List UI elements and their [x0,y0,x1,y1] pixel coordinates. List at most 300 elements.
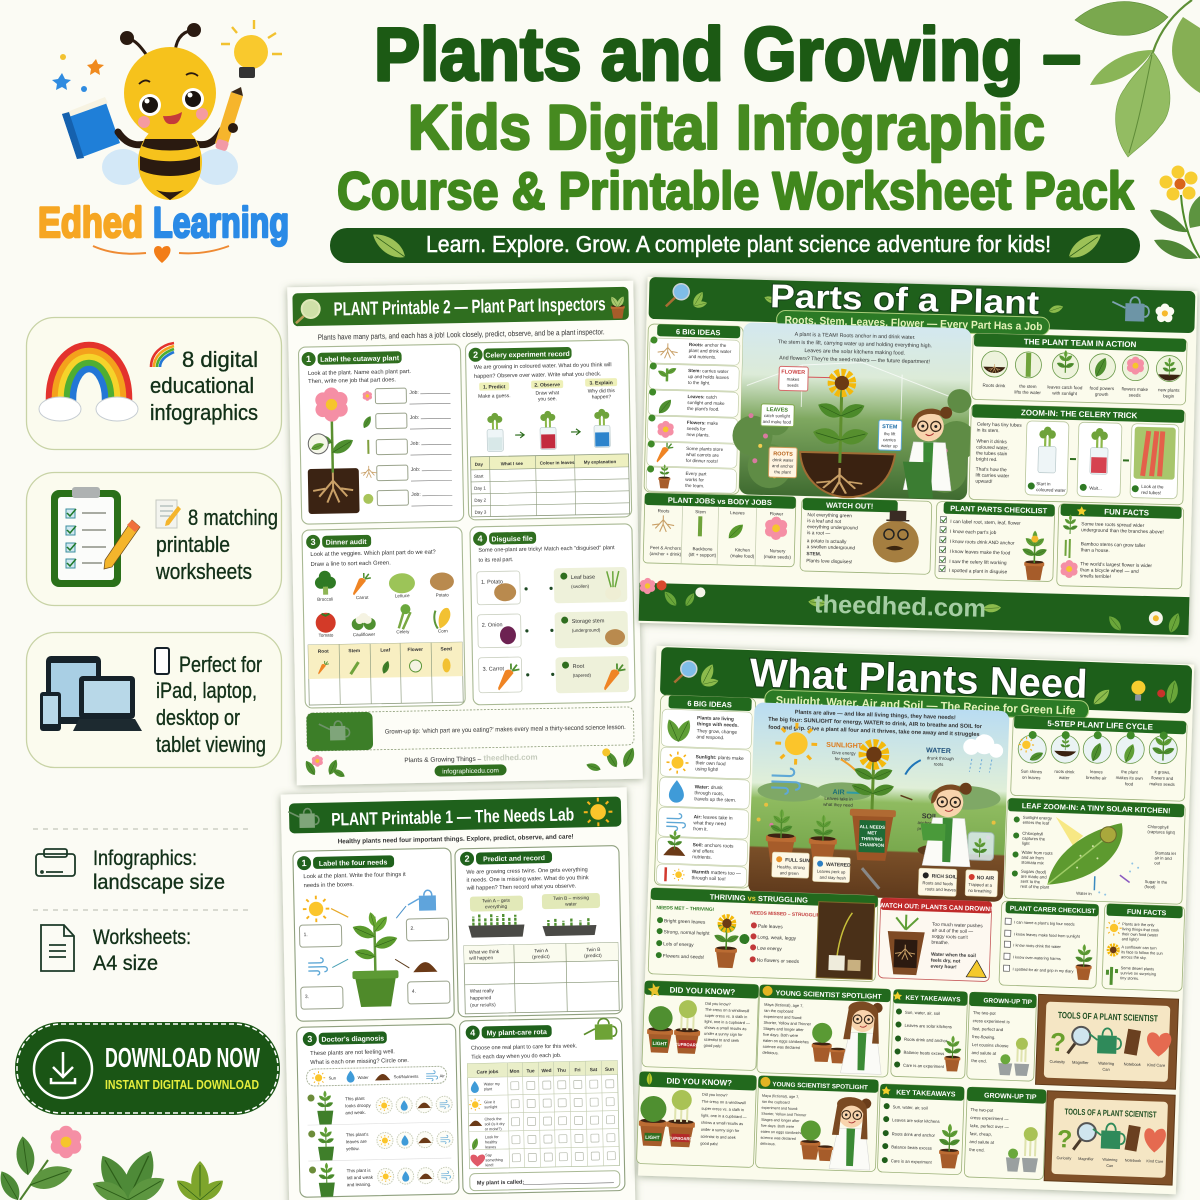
panel: zoom-in celery trick: coloured water, [976,445,1009,451]
panel 3: doctor's diagnosis: Doctor's diagnosis [321,1035,384,1044]
panel: 6 big ideas: nutrients. [692,854,712,861]
panel: thriving vs struggling: THRIVING vs STRUGGLING [710,892,808,905]
needs key: Soil/Nutrients [394,1074,419,1079]
need icons and labels: AIR [832,789,845,796]
icon: stars [52,54,104,92]
rota table: leaves [485,1145,496,1149]
row 2: tools of a plant scientist: Kind Care [1146,1159,1163,1164]
condition labels: NO AIR [977,875,994,882]
panel 4: my plant-care rota [459,1018,625,1194]
panel: fun facts: FUN FACTS [1127,909,1167,917]
row 1: young scientist spotlight [757,985,891,1077]
needs drawing: 3. [305,994,309,1000]
panel: watch out: is a root — [807,530,830,537]
button text: INSTANT DIGITAL DOWNLOAD [105,1077,259,1092]
panel 2: celery experiment record: Celery experiment record [485,351,570,360]
panel: plant jobs vs body jobs: (make seeds) [764,554,792,560]
card text: infographics [150,400,258,425]
row 2: did you know: Did you know? [702,1092,728,1098]
twin labels and trays [468,893,601,938]
panel: 6 big ideas: through roots, [694,790,724,797]
match rows: (underground) [572,627,601,633]
panel 2: predict and record: will happen? Then record what you observe. [466,883,577,892]
panel: 6 big ideas: Leaves: catch [687,394,717,400]
logo: Edhed Learning bee [38,20,289,263]
rota table: or moist?) [485,1127,502,1131]
panel: plant carer checklist: PLANT CARER CHECKLIST [1010,905,1096,915]
potted plants: THRIVING [861,836,883,842]
panel 1: label the cutaway plant: Then, write one job that part does. [308,377,396,385]
row 2: key takeaways: Roots drink and anchor [892,1131,936,1138]
panel: 6 big ideas: and offers [692,848,714,855]
panel: 5-step plant life cycle: makes its own [1116,775,1144,781]
leaf notes: Stomata let [1155,850,1177,856]
panel: device viewing [26,632,282,768]
diagnosis rows: This plant is [347,1168,371,1173]
panel: zoom-in celery trick [969,404,1185,505]
predict table: (predict) [532,954,550,960]
scene intro text: The stem is the lift, carrying water up and holding everything high. [778,339,932,349]
panel: plant parts checklist: I can label root, stem, leaf, flower [950,519,1021,527]
icon: green watering can [584,1018,617,1040]
panel: plant jobs vs body jobs: Flower [770,511,784,517]
row 2: did you know: shows a small results as [701,1120,743,1126]
row 1: grown-up tip: the end. [971,1058,987,1064]
panel: 5-step plant life cycle: on leaves [1022,775,1041,780]
row 1: grown-up tip: fast, perfect and [972,1026,1004,1032]
panel: thriving vs struggling: Lots of energy [663,941,694,948]
match rows: Root [573,664,585,670]
panel: 6 big ideas: sunlight and make [687,400,725,406]
panel: 6 big ideas: Roots: anchor the [689,342,727,348]
scene labels: FLOWER [781,369,805,376]
panel: zoom-in celery trick: Wait... [1089,485,1102,491]
rota table: soil (is it dry [485,1122,505,1126]
plant name line: My plant is called: [477,1180,524,1187]
vegetable labels: Potato [436,592,449,598]
row 2: did you know: LIGHT [645,1135,660,1141]
panel: plant jobs vs body jobs: Nursery [770,548,786,554]
row 2: tools of a plant scientist: Notebook [1125,1158,1141,1163]
size details [33,829,250,975]
scene labels: the lift [884,431,896,436]
vegetable labels: Tomato [319,633,334,638]
panel: 6 big ideas: 6 BIG IDEAS [676,327,721,337]
row 1: tools of a plant scientist: Watering [1098,1060,1114,1066]
icon: phone [155,648,169,674]
icon: wings [102,149,238,185]
twin labels and trays: Twin B – missing [553,895,589,902]
rota table: sunlight [484,1105,498,1109]
panel: plant carer checklist: I can name a plant's big four needs [1014,919,1075,927]
worksheet: PLANT Printable 1 [281,787,636,1200]
leaf notes: rest of the plant [1020,884,1050,890]
row 2: young scientist spotlight: Shorter, Yellow and Thinner [761,1112,807,1117]
row 2: young scientist spotlight: ran the cupboard [762,1100,790,1105]
vegetable labels: Lettuce [395,593,410,598]
cycle steps [1018,731,1178,768]
decoration: top right leaves [1075,0,1200,157]
decoration: worksheet plants [303,746,638,780]
condition labels: RICH SOIL [932,874,957,880]
row 2: did you know: DID YOU KNOW? [666,1076,732,1088]
panel 2: celery experiment record: We are growing in coloured water. What do you think will [474,362,612,371]
experiment steps: Make a guess. [478,393,511,400]
panel 2: celery experiment record: 2 [473,350,478,360]
text: infographics size: landscape size [93,871,225,894]
vegetable labels: Cauliflower [353,632,376,637]
idea rows [646,338,740,493]
panel: 6 big ideas: their own food [695,760,726,767]
needs drawing: 1. [304,932,308,938]
scene intro text: A plant is a TEAM! Roots anchor in and drink water. [795,332,916,341]
record table: Day 2 [474,498,487,503]
worksheet: PLANT Printable 2 [287,281,643,785]
panel: fun facts: survive on surprising [1120,970,1156,976]
panel 4: disguise file: 4 [478,534,483,544]
panel: plant jobs vs body jobs: Kitchen [735,547,751,553]
row 2: young scientist spotlight: eaten on eggs sandwiches [761,1130,805,1135]
leaf notes: (food) [1144,884,1156,889]
panel: 5-step plant life cycle: it grows, [1154,769,1171,775]
twin labels and trays: Twin A – gets [482,898,511,904]
panel: 6 big ideas: travels up the stem. [694,796,736,804]
panel: watch out: STEM. [806,551,821,557]
rota table: Look for [485,1135,499,1139]
icon: light bulb [221,20,282,78]
row 2: young scientist spotlight: Stages and longer after [761,1118,800,1123]
button text: DOWNLOAD NOW [105,1042,260,1073]
leaf notes: Water from roots [1022,850,1053,856]
experiment steps: 3. Explain [589,380,613,387]
panel: watch out plants can drown: feels dry, not [931,958,961,965]
need icons and labels: Leaves take in [824,796,853,802]
job lines [409,390,421,498]
panel: watch out [800,498,932,574]
row 2: did you know: scientist to and seek [700,1134,736,1140]
panel: fun facts: Some tree roots spread wider [1081,521,1145,529]
decoration: yellow flower and leaves [1150,166,1200,259]
panel: fun facts: underground than the branches above! [1081,527,1164,535]
panel: 6 big ideas: and nutrients. [688,354,716,360]
panel: plant team in action: lifts the water [1014,390,1042,395]
row 1: young scientist spotlight: Maya (fictional), age 7, [764,1002,804,1008]
panel: fun facts: A sunflower can turn [1121,944,1157,950]
leaf drawing [1047,817,1141,897]
scene intro text: Leaves are the solar kitchens making food. [804,348,905,357]
panel 3: dinner audit: 3 [311,537,316,547]
panel: zoom-in celery trick: upward! [975,479,993,485]
panel: watch out plants can drown: Water when the soil [931,952,976,959]
card text: worksheets [155,559,252,584]
logo wordmark: Edhed [38,199,143,247]
panel: zoom-in celery trick: Look at the [1141,484,1164,489]
need icons and labels: Give energy [832,750,857,756]
vegetables [315,568,455,633]
row 2: did you know: under a sunny sign for [701,1127,740,1133]
panel: plant carer checklist: I know leaves make food from sunlight [1014,931,1081,939]
icon: rainbow [39,345,138,421]
panel: fun facts: The world's largest flower is wider [1080,561,1153,569]
job lines: Job: [411,492,421,498]
panel 3: dinner audit: Dinner audit [326,539,367,547]
row 1: young scientist spotlight: experiment and found: [764,1014,803,1020]
scene labels: drink water [772,457,794,463]
row 1: key takeaways: Sun, water, air, soil [905,1010,940,1016]
row 2: young scientist spotlight: YOUNG SCIENTIST SPOTLIGHT [772,1081,868,1091]
panel: plant parts checklist: I know each part's job [950,529,997,536]
panel: plant carer checklist: I spotted for air and grip in my diary [1012,966,1074,974]
panel: 6 big ideas: Soil: anchors roots [693,842,734,850]
row 1: young scientist spotlight: YOUNG SCIENTIST SPOTLIGHT [775,990,882,1001]
rota table: Fri [574,1067,581,1074]
panel: 6 big ideas: and respond. [696,734,725,741]
scene: garden with young scientist [748,702,1010,902]
panel: plant jobs vs body jobs [643,493,796,567]
icon: bee body [118,23,222,200]
row 1: grown-up tip: and salute at [971,1050,997,1056]
panel: watch out plants can drown: breathe. [931,940,949,946]
icon: tablet, laptop and phone [40,656,142,731]
panel: plant team in action: the stem [1019,384,1037,389]
panel: 6 big ideas: up and holds leaves [688,374,730,380]
row 1: key takeaways: KEY TAKEAWAYS [905,995,961,1004]
celery cups [487,409,610,452]
needs drawing [299,890,450,1009]
panel: plant team in action: growth [1095,392,1109,397]
match rows: Leaf base [571,575,595,581]
logo wordmark [38,199,289,247]
scene labels: and anchor [772,463,794,469]
panel: zoom-in celery trick: Celery has tiny tubes [977,422,1022,429]
panel: fun facts: FUN FACTS [1104,507,1150,518]
logo heart swoosh [93,246,229,263]
title line 2: Kids Digital Infographic [408,93,1045,163]
sorting table: Stem [348,648,360,654]
label boxes [375,388,408,506]
panel: plant parts checklist: I know roots drink AND anchor [950,539,1015,547]
grown-up tip [306,707,634,751]
decoration: bottom left plants [0,1126,227,1200]
panel: plant parts checklist: I spotted a plant in disguise [949,568,1008,575]
button text [105,1042,260,1092]
needs key: Air [440,1073,445,1078]
panel: 6 big ideas [644,324,743,494]
panel: watch out plants can drown: every hour! [930,964,957,970]
panel: 5-step plant life cycle: water [1059,775,1070,780]
panel 2: predict and record: it needs. One is missing water. What do you think [466,875,589,884]
scene labels: carries [883,437,896,442]
row 2: key takeaways: Balance beats excess [891,1144,932,1151]
celery steps [1025,421,1179,499]
panel: 6 big ideas: They grow, change [697,728,738,736]
icon: pencil [215,87,243,152]
panel: 6 big ideas: through soil too! [691,875,726,882]
panel: 6 big ideas: Flowers: make [687,420,719,426]
potted plants: ALL NEEDS [860,824,885,830]
card text [156,652,266,757]
scene labels: makes [787,377,799,382]
download button [15,1022,280,1115]
panel: thriving vs struggling: NEEDS MISSED – STRUGGLING! [750,910,826,919]
predict table: (predict) [584,953,602,959]
row 2: grown-up tip: cress experiment — [970,1115,1009,1121]
row 1: did you know: super cress vs. a stalk in [705,1013,747,1019]
panel 4: my plant-care rota: 4 [470,1028,475,1038]
panel: plant jobs vs body jobs: Stem [695,509,706,514]
leaf notes: Sunlight energy [1023,815,1053,821]
rota table: Mon [510,1069,520,1075]
panel: 6 big ideas: Sunlight: plants make [696,754,744,762]
panel: thriving vs struggling: Low energy [757,946,783,952]
panel: thriving vs struggling: Long, weak, leggy [757,935,797,942]
worksheet header [292,287,629,326]
icon: worksheet and pencil [156,500,181,528]
row 1: young scientist spotlight: science was declared [763,1044,800,1050]
row 1: did you know: light, one in a cupboard — [704,1019,750,1025]
row 1: grown-up tip: free-flowing. [972,1034,996,1040]
rota table: something [485,1158,503,1162]
row 2: young scientist spotlight [755,1076,879,1172]
row 1: did you know: The cress on a windowsill [705,1007,749,1013]
leaf notes: air in and [1154,855,1172,861]
panel 2: predict and record: 2 [464,854,470,864]
needs key: Sun [329,1075,337,1081]
experiment steps [478,378,617,404]
panel: zoom-in celery trick: ZOOM-IN: THE CELERY TRICK [1021,408,1138,420]
leaf notes: (captures light) [1147,829,1176,835]
row 2: young scientist spotlight: science was declared [760,1136,796,1141]
panel 2: celery experiment record: happen? Observe over water. Write what you check. [474,371,602,380]
icon: document [41,925,74,971]
diagnosis rows: leaves are [346,1139,367,1144]
scene labels: catch sunlight [764,413,791,419]
panel: 6 big ideas: 6 BIG IDEAS [687,699,732,709]
card text: iPad, laptop, [156,678,257,703]
panel: zoom-in celery trick: Start in [1036,481,1051,486]
row 2: grown-up tip [964,1087,1046,1180]
leaf notes: sent to the [1021,879,1041,884]
panel: fun facts: than a bicycle wheel — and [1080,567,1139,575]
rota table: healthy [485,1140,497,1144]
worksheet header [288,796,621,833]
panel: 6 big ideas: Stem: carries water [688,368,729,374]
row 1: did you know: good pals! [704,1043,722,1048]
scene: sunflower and young scientist [731,322,979,501]
predict table: What we think [469,949,500,956]
icon: book [62,97,120,159]
condition labels: and stay fresh [820,875,847,881]
panel: zoom-in celery trick: coloured water [1036,487,1066,493]
panel: fun facts [1057,504,1184,589]
panel 1: label the four needs: Label the four needs [319,859,388,868]
row 2: key takeaways [877,1084,964,1175]
need icons and labels: SUNLIGHT [826,742,863,750]
leaf notes: captures the [1022,836,1046,842]
sorting table: Root [318,649,329,655]
row 1: did you know: Did you know? [705,1001,732,1007]
grown-up tip: Grown-up tip: 'which part are you eating?' makes every meal a thirty-second science lesson. [385,724,626,736]
row 1: tools of a plant scientist: TOOLS OF A PLANT SCIENTIST [1058,1010,1158,1024]
young scientist [902,406,953,499]
panel: plant carer checklist: I know roots drink the water [1013,942,1062,949]
panel: 5-step plant life cycle: roots drink [1054,769,1075,775]
icon: clipboard with pencil [51,487,140,587]
match rows [477,567,629,695]
predict table: (our results) [470,1002,496,1009]
panel: 5-step plant life cycle [1011,715,1187,801]
needs drawing: 2. [410,926,415,932]
text: infographics size [93,847,225,894]
panel: 8 matching worksheets [26,472,282,606]
row 1: tools of a plant scientist: Curiosity [1049,1059,1065,1064]
subtitle pill: Sunlight, Water, Air and Soil — The Recipe for Green Life [776,695,1076,717]
panel: plant jobs vs body jobs: Backbone [692,546,713,552]
condition labels: FULL SUN [785,857,810,864]
rota table: kind! [485,1163,494,1167]
panel: plant jobs vs body jobs: (anchor + drink) [649,551,682,557]
panel: watch out plants can drown: soggy roots can't [932,934,968,941]
row 2: young scientist spotlight: delicious. [760,1142,776,1146]
row 1: tools of a plant scientist: Notebook [1124,1061,1141,1067]
panel: watch out plants can drown: air out of the soil — [932,928,973,935]
condition labels: no breathing [968,888,992,894]
panel: plant team in action: begin [1163,393,1175,399]
sorting table: Flower [407,647,423,653]
panel: plant team in action: with sunlight [1052,390,1078,396]
row 2: did you know: super cress vs. a stalk in [701,1106,744,1112]
panel: fun facts: and light)! [1122,936,1139,942]
condition labels: Leaves perk up [817,869,846,875]
infographic header: Parts of a Plant [770,277,1040,321]
match rows: 1. Potato [481,579,503,586]
panel 3: dinner audit [302,527,465,708]
panel: 6 big ideas: things with needs. [697,721,739,729]
card text: educational [150,373,254,398]
panel 1: label the cutaway plant: Look at the plant. Name each plant part. [308,369,411,377]
card text: tablet viewing [156,732,266,757]
panel: plant team in action: flowers make [1122,386,1149,392]
vegetable labels: Broccoli [317,597,333,602]
panel: 5-step plant life cycle: flowers and [1151,775,1174,781]
panel 1: label the four needs [293,848,454,1021]
row 1: did you know: shows a small results as [704,1025,747,1031]
row 1: did you know: DID YOU KNOW? [669,985,735,997]
job lines: Job: [409,390,419,396]
leaf notes: and air from [1021,855,1044,860]
scene labels: and make food [763,419,792,425]
panel: fun facts [1102,904,1185,991]
panel: fun facts: their own food (water [1122,931,1159,938]
row 1: young scientist spotlight: eaten on eggs sandwiches [763,1038,809,1044]
infographic header: What Plants Need [749,651,1088,707]
row 1: did you know: scientist to and seek [704,1037,739,1043]
row 2: did you know: light, one in a cupboard — [701,1113,747,1119]
row 2: grown-up tip: and salute at [969,1139,995,1145]
panel 3: dinner audit: Draw a line to sort each Green. [311,560,391,568]
panel 3: doctor's diagnosis: What is each one missing? Circle one. [310,1058,409,1066]
row 1: grown-up tip [967,992,1037,1081]
panel 1: label the four needs: Look at the plant. Write the four things it [303,872,406,880]
vegetable labels: Carrot [356,595,369,600]
panel: 6 big ideas: from it. [693,826,708,833]
scene labels [759,366,903,481]
row 1: tools of a plant scientist: ? [1050,1027,1066,1057]
row 2: young scientist spotlight: experiment and found: [761,1106,798,1111]
scene labels: the plant [774,469,792,475]
scene labels: STEM [882,424,898,430]
predict table [464,943,619,1014]
